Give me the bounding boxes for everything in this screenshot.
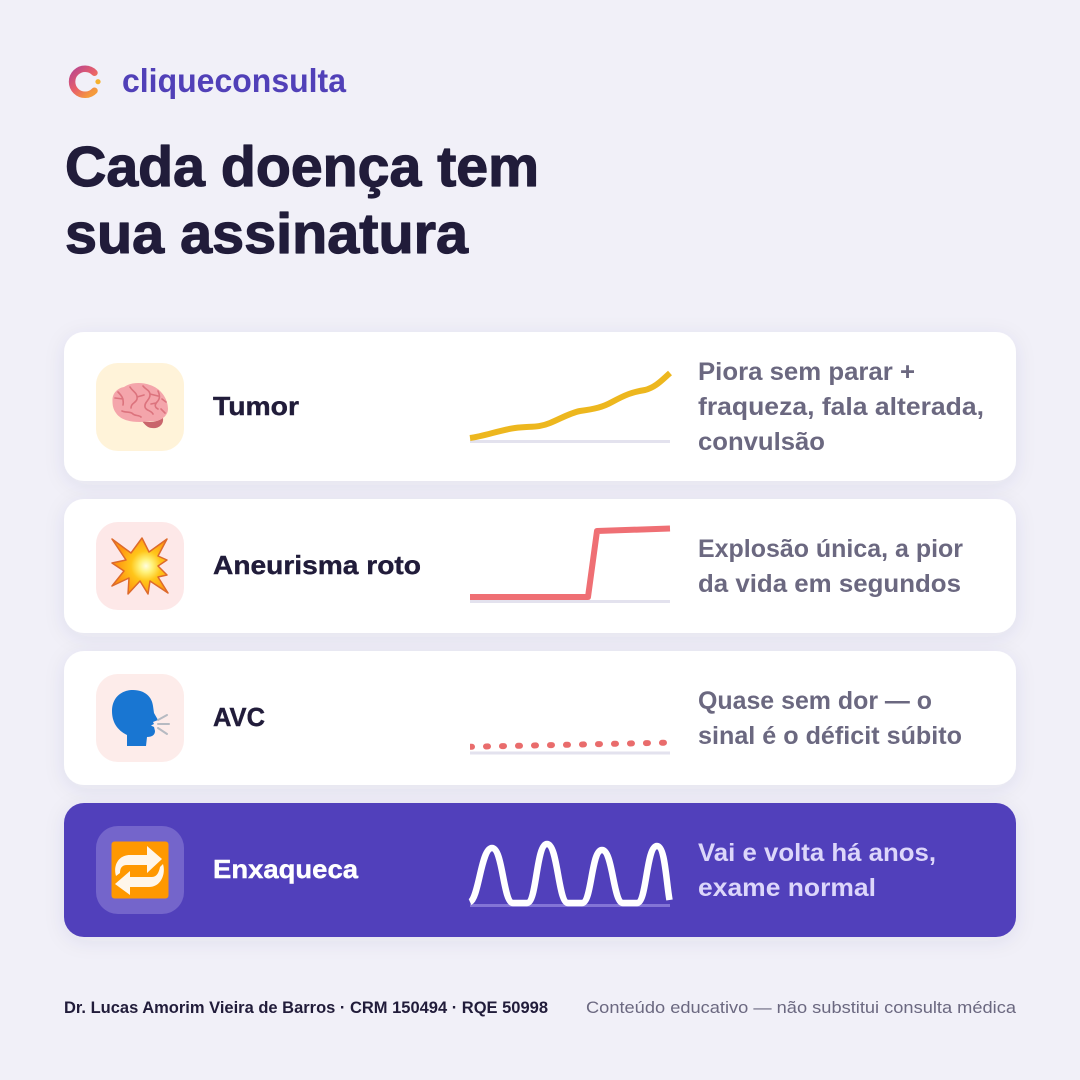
icon: brain — [96, 363, 184, 451]
panel: enxaqueca — [64, 803, 1016, 937]
panel: avc — [64, 651, 1016, 785]
description: tumor: convulsão — [698, 428, 825, 456]
description: tumor: fraqueza, fala alterada, — [698, 393, 984, 421]
panel: aneurisma roto — [64, 499, 1016, 633]
label: aneurisma roto: Aneurisma roto — [213, 550, 421, 580]
logo wordmark: cliqueconsulta — [122, 62, 347, 99]
description: tumor — [698, 358, 984, 456]
description: aneurisma roto: da vida em segundos — [698, 570, 961, 598]
logo — [72, 62, 347, 99]
title: sua assinatura — [65, 202, 469, 266]
chart: repeating waves — [470, 844, 670, 906]
description: avc: sinal é o déficit súbito — [698, 722, 962, 750]
title: Cada doença tem — [65, 135, 539, 199]
description: avc — [698, 687, 962, 750]
description: enxaqueca: Vai e volta há anos, — [698, 839, 936, 867]
description: avc: Quase sem dor — o — [698, 687, 932, 715]
footer: author credentials: Dr. Lucas Amorim Vieira de Barros · CRM 150494 · RQE 50998 — [64, 999, 548, 1017]
icon: repeat arrows — [96, 826, 184, 914]
logo mark — [72, 69, 101, 95]
chart: tumor curve — [470, 373, 670, 442]
icon: speaking head — [96, 674, 184, 762]
chart: low dotted line — [470, 743, 670, 753]
description: tumor: Piora sem parar + — [698, 358, 915, 386]
label: tumor: Tumor — [213, 391, 299, 421]
title — [65, 135, 539, 266]
footer: disclaimer: Conteúdo educativo — não substitui consulta médica — [586, 999, 1017, 1017]
label: avc: AVC — [213, 702, 265, 732]
description: aneurisma roto — [698, 535, 963, 598]
description: enxaqueca — [698, 839, 936, 902]
chart: sudden spike — [470, 528, 670, 602]
label: enxaqueca: Enxaqueca — [213, 854, 359, 884]
icon: explosion — [96, 522, 184, 610]
panel: tumor — [64, 332, 1016, 481]
description: aneurisma roto: Explosão única, a pior — [698, 535, 963, 563]
description: enxaqueca: exame normal — [698, 874, 876, 902]
